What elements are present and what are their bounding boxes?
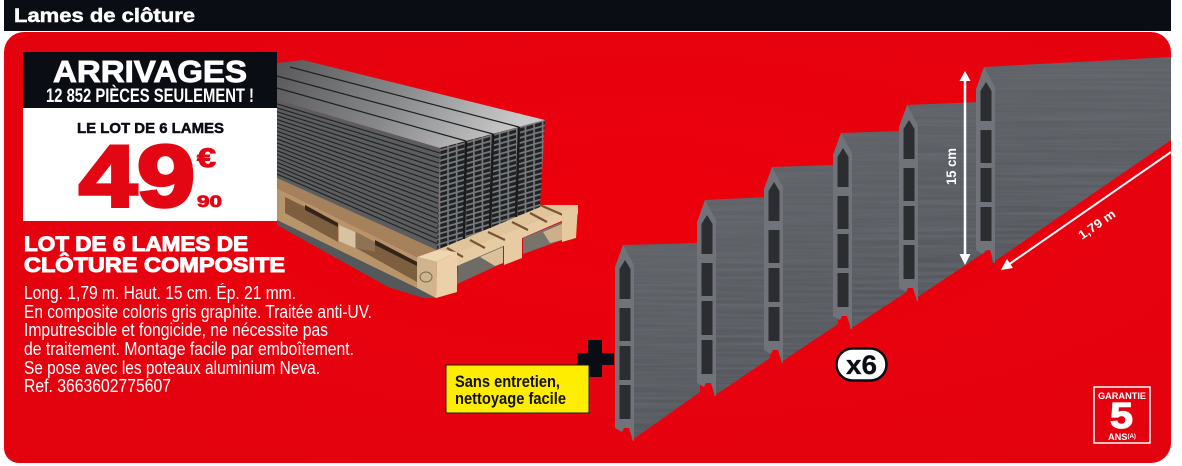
product description: de traitement. Montage facile par emboîtement.: [24, 338, 354, 359]
stack end face: [437, 120, 545, 250]
badge: x6: x6: [846, 350, 877, 380]
arrow: height 15 cm: 15 cm: [944, 148, 959, 185]
slat faces: [623, 57, 1171, 440]
product description: Long. 1,79 m. Haut. 15 cm. Ép. 21 mm.: [24, 282, 296, 303]
stack side face: [277, 100, 440, 250]
pallet long side: [277, 188, 417, 288]
guarantee badge: [1094, 387, 1150, 443]
pallet long side block: [339, 225, 355, 248]
arrow: length 1,79 m: 1,79 m: [1076, 207, 1118, 242]
icon: plus sign: [577, 340, 614, 377]
product description: En composite coloris gris graphite. Traitée anti-UV.: [24, 301, 372, 322]
product title: LOT DE 6 LAMES DE: [24, 233, 248, 256]
arrow: length 1,79 m: [1001, 152, 1171, 270]
wood grain texture: [610, 50, 1175, 450]
callout: easy care: nettoyage facile: [455, 390, 566, 408]
stack top face: [277, 60, 545, 148]
price box: [23, 52, 277, 225]
product title: [24, 233, 285, 277]
banner subheading: 12 852 PIÈCES SEULEMENT !: [46, 85, 254, 107]
price: [79, 128, 222, 225]
product title: CLÔTURE COMPOSITE: [24, 253, 285, 277]
price: 49: [79, 128, 195, 225]
price: €: [197, 143, 216, 173]
fence slats: [610, 50, 1175, 450]
slat 1 end: [615, 245, 634, 441]
product description: Ref. 3663602775607: [24, 375, 171, 396]
pallet opening 2: [356, 232, 417, 282]
pallet deck: [277, 177, 437, 257]
pallet opening 1: [285, 197, 338, 242]
pallet blocks: [417, 250, 457, 262]
slat 4 end: [833, 133, 852, 329]
product description: Imputrescible et fongicide, ne nécessite pas: [24, 319, 328, 340]
product description: [24, 282, 372, 396]
slat 2 end: [697, 200, 716, 396]
pallet short side openings: [457, 245, 503, 284]
callout: easy care: Sans entretien,: [455, 373, 560, 391]
guarantee badge: ANS: [1108, 432, 1127, 442]
arrow: height 15 cm: [944, 71, 970, 265]
guarantee badge: 5: [1110, 395, 1133, 436]
product photo: stack of slats on a pallet: [277, 60, 578, 298]
header title: Lames de clôture: [14, 5, 195, 27]
pallet shadow: [277, 217, 436, 298]
slat 5 end: [899, 105, 918, 301]
banner heading: ARRIVAGES: [53, 54, 247, 89]
slat 6 end: [976, 67, 995, 263]
product description: Se pose avec les poteaux aluminium Neva.: [24, 357, 320, 378]
header bar: [4, 0, 1171, 31]
badge: x6: [836, 348, 886, 380]
deck slat gaps: [447, 205, 563, 257]
lot label: LE LOT DE 6 LAMES: [77, 120, 224, 137]
guarantee badge: GARANTIE: [1098, 391, 1146, 401]
callout: easy care: [446, 365, 589, 413]
arrivals banner: [23, 52, 277, 108]
price: 90: [197, 192, 222, 211]
slat 3 end: [764, 167, 783, 363]
guarantee badge: (A): [1127, 434, 1136, 440]
